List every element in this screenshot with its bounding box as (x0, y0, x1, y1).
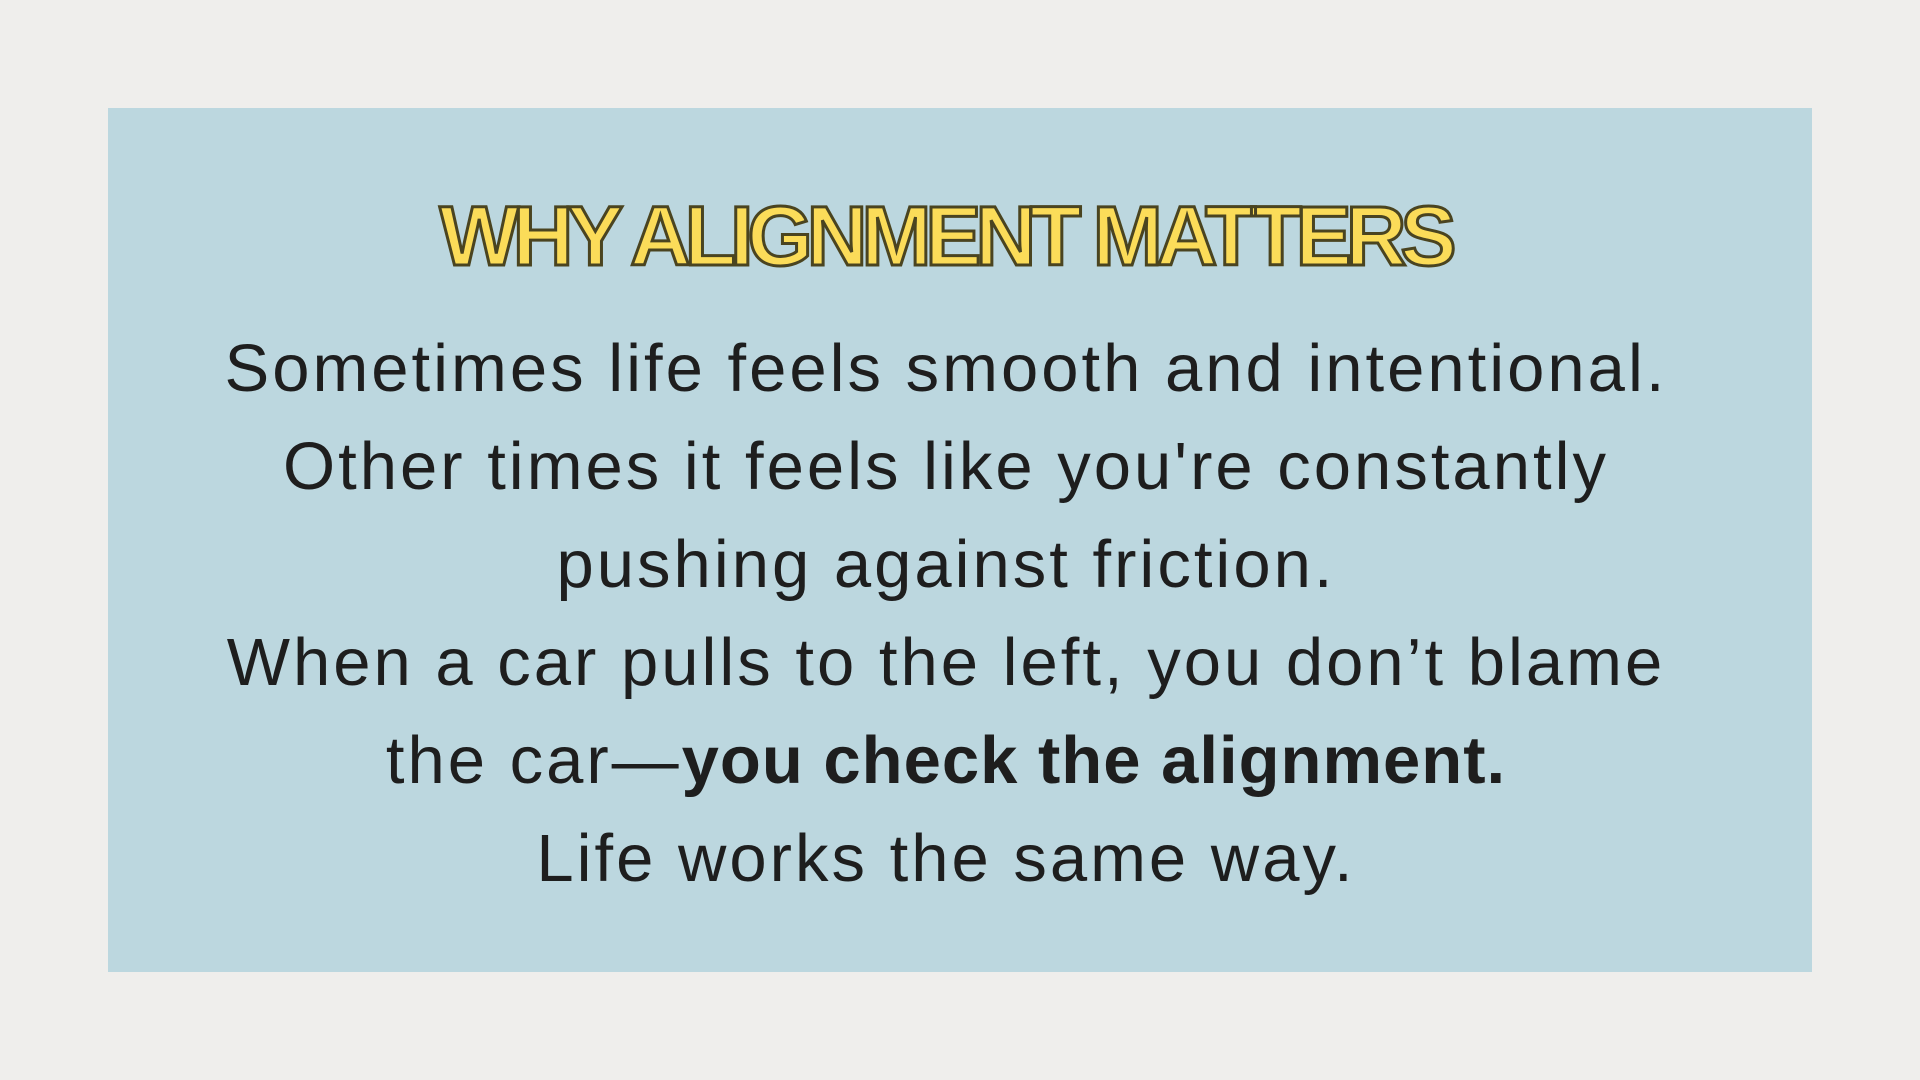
text block: body copy: Other times it feels like you're constantly (283, 429, 1609, 504)
text block: body copy (225, 331, 1667, 896)
text block: body copy: the car—you check the alignment. (386, 723, 1506, 798)
title: WHY ALIGNMENT MATTERS (439, 189, 1451, 283)
text block: body copy: Sometimes life feels smooth and intentional. (225, 331, 1667, 406)
text block: body copy: Life works the same way. (536, 821, 1356, 896)
text block: body copy: pushing against friction. (557, 527, 1335, 602)
panel: main card (108, 108, 1812, 972)
text block: body copy: When a car pulls to the left, you don’t blame (227, 625, 1665, 700)
